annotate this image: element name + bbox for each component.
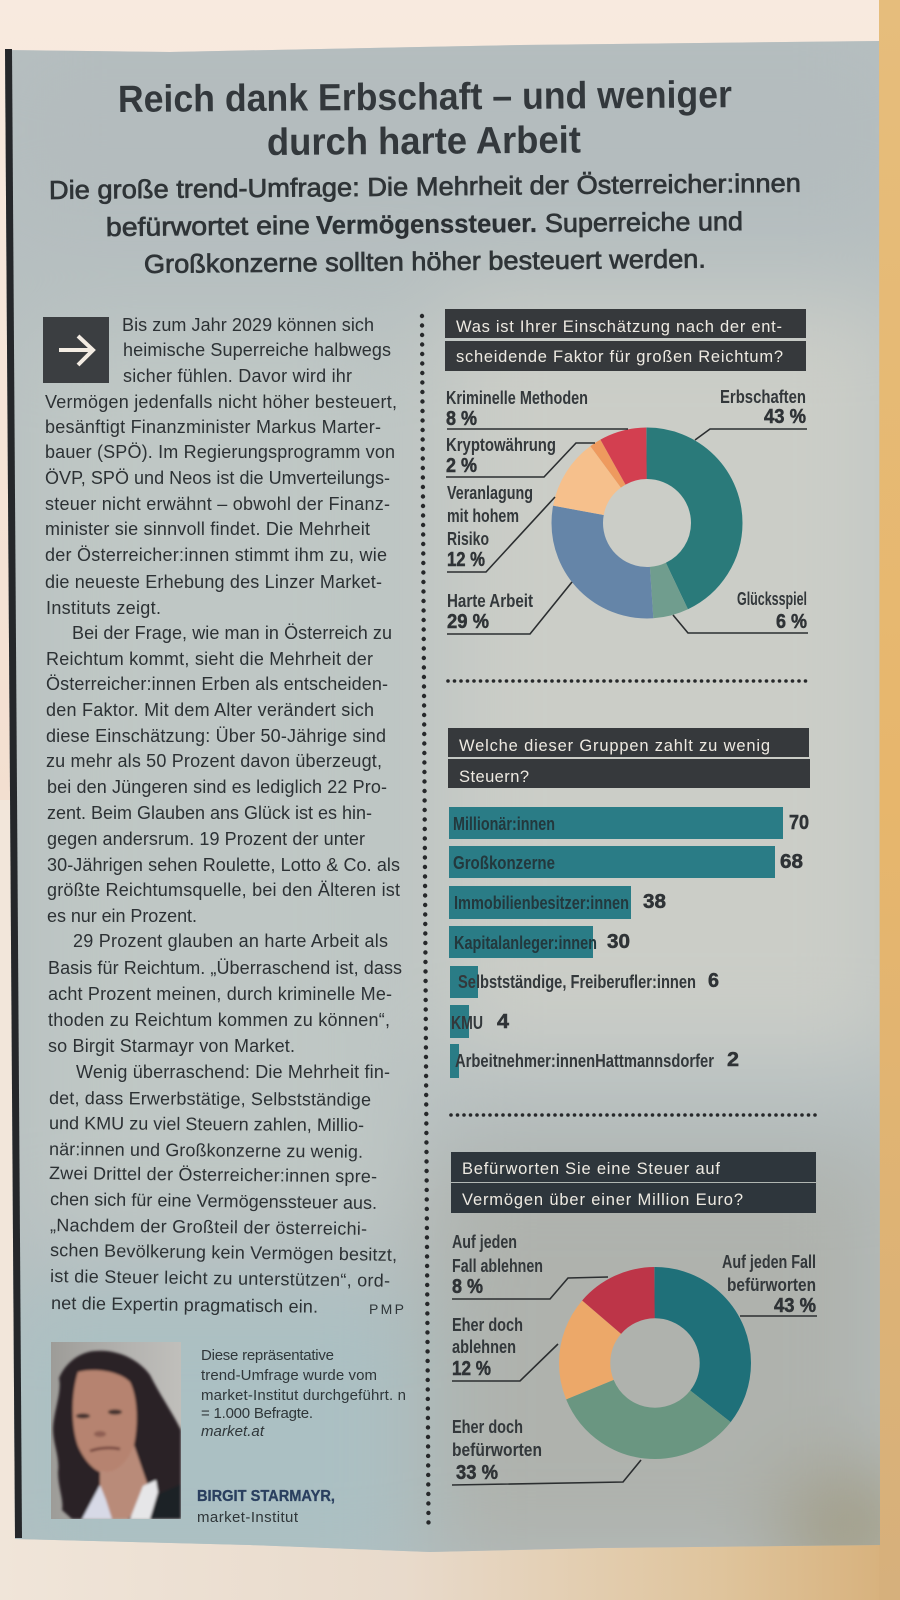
article body text: chen sich für eine Vermögenssteuer aus. bbox=[50, 1189, 377, 1213]
article body text: sicher fühlen. Davor wird ihr bbox=[123, 366, 352, 386]
article body text: Instituts zeigt. bbox=[46, 598, 161, 618]
article body text: den Faktor. Mit dem Alter verändert sich bbox=[46, 700, 374, 720]
article body text: steuer nicht erwähnt – obwohl der Finanz- bbox=[45, 494, 390, 514]
bar chart: 38 bbox=[643, 891, 666, 913]
article body text: zu mehr als 50 Prozent davon überzeugt, bbox=[46, 751, 382, 771]
data labels: 12 % bbox=[452, 1358, 491, 1380]
title: durch harte Arbeit bbox=[267, 120, 581, 164]
article body text: heimische Superreiche halbwegs bbox=[123, 340, 391, 360]
panel: tax groups chart bbox=[448, 728, 810, 1078]
black page edge strip bbox=[5, 49, 22, 1538]
leader lines bbox=[446, 429, 808, 634]
bar chart: 2 bbox=[727, 1049, 739, 1071]
expert name: BIRGIT STARMAYR, bbox=[197, 1488, 335, 1505]
survey caption: market.at bbox=[201, 1423, 265, 1440]
article body text: Zwei Drittel der Österreicher:innen spre- bbox=[49, 1163, 377, 1186]
article body text: gegen andersrum. 19 Prozent der unter bbox=[47, 829, 365, 849]
article body text: Vermögen jedenfalls nicht höher besteuert, bbox=[45, 392, 397, 412]
article body text: Reichtum kommt, sieht die Mehrheit der bbox=[46, 649, 373, 669]
expert name: market-Institut bbox=[197, 1509, 299, 1526]
horizontal dotted divider bbox=[448, 679, 808, 683]
article body text: thoden zu Reichtum kommen zu können“, bbox=[48, 1010, 390, 1030]
data labels: Erbschaften bbox=[720, 387, 806, 407]
data labels: 8 % bbox=[452, 1276, 483, 1298]
question header 1 bbox=[445, 309, 806, 371]
subtitle: Die große trend-Umfrage: Die Mehrheit der Österreicher:innen bbox=[49, 168, 801, 205]
donut chart 2 bbox=[585, 1293, 725, 1433]
data labels: 43 % bbox=[764, 406, 806, 428]
survey caption: = 1.000 Befragte. bbox=[201, 1405, 313, 1422]
data labels: Kryptowährung bbox=[446, 435, 556, 455]
article body text: bei den Jüngeren sind es lediglich 22 Pro- bbox=[47, 777, 387, 797]
article body text: größte Reichtumsquelle, bei den Älteren ist bbox=[47, 880, 400, 900]
survey caption: trend-Umfrage wurde vom bbox=[201, 1367, 377, 1384]
article body text: und KMU zu viel Steuern zahlen, Millio- bbox=[49, 1113, 364, 1135]
question header 3: Vermögen über einer Million Euro? bbox=[462, 1191, 743, 1209]
article body text: 30-Jährigen sehen Roulette, Lotto & Co. als bbox=[47, 855, 400, 875]
data labels: 33 % bbox=[456, 1462, 498, 1484]
data labels: Risiko bbox=[447, 529, 489, 549]
subtitle bbox=[49, 168, 801, 279]
data labels: 2 % bbox=[446, 455, 477, 477]
article body text: ist die Steuer leicht zu unterstützen“, ord- bbox=[50, 1266, 390, 1291]
article body text: die neueste Erhebung des Linzer Market- bbox=[45, 572, 382, 592]
data labels: Eher doch bbox=[452, 1417, 523, 1437]
article body text: bauer (SPÖ). Im Regierungsprogramm von bbox=[45, 442, 395, 462]
bar chart: 30 bbox=[607, 931, 630, 953]
expert name bbox=[197, 1488, 335, 1526]
article body text: Wenig überraschend: Die Mehrheit fin- bbox=[76, 1062, 390, 1082]
subtitle: Großkonzerne sollten höher besteuert werden. bbox=[144, 244, 706, 279]
subtitle: Superreiche und bbox=[545, 206, 743, 238]
article body text: so Birgit Starmayr von Market. bbox=[48, 1036, 295, 1056]
bar chart: KMU bbox=[451, 1013, 483, 1033]
question header 3: Befürworten Sie eine Steuer auf bbox=[462, 1160, 720, 1178]
article body text: zent. Beim Glauben ans Glück ist es hin- bbox=[47, 803, 372, 823]
data labels: 12 % bbox=[447, 549, 485, 571]
article body text: PMP bbox=[369, 1301, 404, 1317]
icon: arrow box bbox=[43, 317, 109, 383]
data labels: mit hohem bbox=[447, 506, 519, 526]
data labels: Eher doch bbox=[452, 1315, 523, 1335]
article body text: Österreicher:innen Erben als entscheiden- bbox=[46, 674, 388, 694]
data labels: Fall ablehnen bbox=[452, 1256, 543, 1276]
article body text bbox=[45, 315, 404, 1317]
data labels: 43 % bbox=[774, 1295, 816, 1317]
question header 2: Steuern? bbox=[459, 768, 529, 786]
panel: wealth tax chart bbox=[451, 1152, 817, 1485]
data labels: ablehnen bbox=[452, 1337, 516, 1357]
data labels: 29 % bbox=[447, 611, 489, 633]
bar chart: 70 bbox=[789, 812, 809, 834]
data labels: befürworten bbox=[452, 1440, 542, 1460]
bar chart: 4 bbox=[497, 1011, 510, 1033]
article body text: 29 Prozent glauben an harte Arbeit als bbox=[73, 931, 388, 951]
data labels: 6 % bbox=[776, 611, 807, 633]
survey caption: market-Institut durchgeführt. n bbox=[201, 1387, 406, 1404]
article body text: „Nachdem der Großteil der österreichi- bbox=[50, 1215, 367, 1239]
article body text: det, dass Erwerbstätige, Selbstständige bbox=[49, 1088, 371, 1110]
title: Reich dank Erbschaft – und weniger bbox=[118, 74, 732, 121]
leader lines bbox=[452, 1277, 817, 1485]
title bbox=[118, 74, 732, 164]
bar chart: Großkonzerne bbox=[453, 853, 555, 873]
article body text: der Österreicher:innen stimmt ihm zu, wie bbox=[45, 545, 387, 565]
data labels: 8 % bbox=[446, 408, 477, 430]
data labels: befürworten bbox=[727, 1275, 816, 1295]
vertical dotted divider bbox=[422, 316, 428, 1526]
bar chart: Selbstständige, Freiberufler:innen bbox=[458, 972, 696, 992]
article body text: minister sie sinnvoll findet. Die Mehrheit bbox=[45, 519, 370, 539]
data labels: Auf jeden bbox=[452, 1232, 517, 1252]
bar chart bbox=[449, 807, 809, 1078]
data labels: Harte Arbeit bbox=[447, 591, 533, 611]
article body text: net die Expertin pragmatisch ein. bbox=[51, 1293, 318, 1317]
donut chart 1 bbox=[577, 453, 717, 593]
bar chart: 68 bbox=[780, 851, 803, 873]
data labels: Glücksspiel bbox=[737, 589, 807, 609]
article body text: es nur ein Prozent. bbox=[47, 906, 197, 926]
data labels bbox=[446, 387, 807, 633]
article body text: Bis zum Jahr 2029 können sich bbox=[122, 315, 374, 335]
question header 1: Was ist Ihrer Einschätzung nach der ent- bbox=[456, 318, 782, 336]
bar chart: Arbeitnehmer:innenHattmannsdorfer bbox=[455, 1051, 714, 1071]
question header 2 bbox=[448, 728, 810, 788]
bar chart: 6 bbox=[708, 970, 719, 992]
question header 2: Welche dieser Gruppen zahlt zu wenig bbox=[459, 737, 770, 755]
subtitle: befürwortet eine bbox=[106, 210, 310, 242]
data labels: Veranlagung bbox=[447, 483, 533, 503]
article body text: diese Einschätzung: Über 50-Jährige sind bbox=[46, 726, 386, 746]
article body text: ÖVP, SPÖ und Neos ist die Umverteilungs- bbox=[45, 468, 390, 488]
article body text: besänftigt Finanzminister Markus Marter- bbox=[45, 417, 381, 437]
bar chart: Kapitalanleger:innen bbox=[454, 933, 597, 953]
article body text: Basis für Reichtum. „Überraschend ist, dass bbox=[48, 958, 402, 978]
data labels: Kriminelle Methoden bbox=[446, 388, 588, 408]
portrait photo bbox=[51, 1342, 181, 1519]
subtitle: Vermögenssteuer. bbox=[316, 208, 537, 240]
survey caption: Diese repräsentative bbox=[201, 1347, 334, 1364]
article body text: schen Bevölkerung kein Vermögen besitzt, bbox=[50, 1240, 397, 1265]
survey caption bbox=[201, 1347, 406, 1440]
horizontal dotted divider bbox=[451, 1113, 816, 1117]
article body text: Bei der Frage, wie man in Österreich zu bbox=[72, 623, 392, 643]
data labels: Auf jeden Fall bbox=[722, 1252, 816, 1272]
question header 3 bbox=[451, 1152, 816, 1213]
bar chart: Millionär:innen bbox=[453, 814, 555, 834]
bar chart: Immobilienbesitzer:innen bbox=[454, 893, 629, 913]
panel: wealth factor chart bbox=[445, 309, 808, 634]
article body text: när:innen und Großkonzerne zu wenig. bbox=[49, 1139, 363, 1162]
data labels bbox=[452, 1232, 816, 1484]
question header 1: scheidende Faktor für großen Reichtum? bbox=[456, 348, 783, 366]
article body text: acht Prozent meinen, durch kriminelle Me- bbox=[48, 984, 392, 1004]
